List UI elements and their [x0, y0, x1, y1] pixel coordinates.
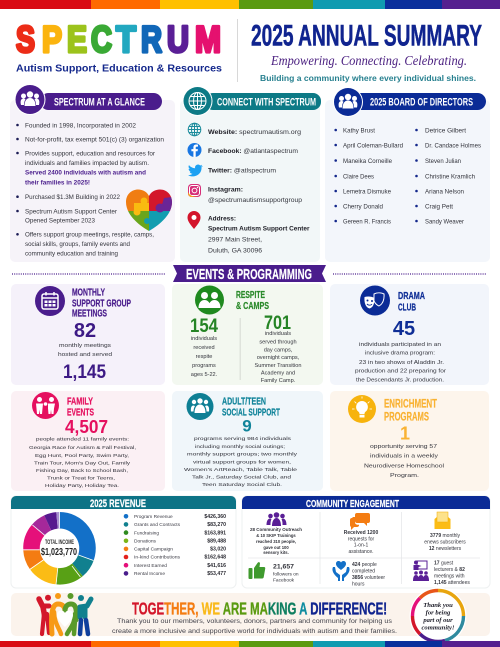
enrichment heading: PROGRAMS: [384, 410, 429, 424]
stat: guest lecturers: meetings with: [434, 574, 465, 580]
stat: volunteers: [332, 561, 385, 588]
stat: guest lecturers: lecturers & 82: [434, 567, 465, 573]
revenue legend: $53,477: [207, 571, 226, 577]
events and programming banner: [173, 265, 326, 283]
panel: 2025 revenue: [11, 496, 236, 588]
drama stats: inclusive drama program:: [365, 350, 435, 356]
respite stat 154: ages 5-22.: [191, 372, 218, 378]
board names: Cherry Donald: [343, 203, 383, 210]
subtitle script: Empowering. Connecting. Celebrating.: [270, 53, 467, 68]
events and programming banner: EVENTS & PROGRAMMING: [186, 267, 312, 283]
respite stat 154: respite: [196, 354, 212, 360]
stat: volunteers: completed: [352, 568, 375, 574]
revenue legend: $426,360: [204, 514, 226, 520]
revenue header: [11, 496, 236, 510]
adult teen heading: SOCIAL SUPPORT: [222, 406, 280, 418]
board names: Steven Julian: [425, 158, 461, 165]
logo: SPECTRUM: C: [91, 19, 112, 60]
adult teen stats: including monthly social outings;: [195, 444, 285, 449]
respite stat 701: overnight camps,: [257, 355, 300, 361]
family stats: Egg Hunt, Pool Party, Swim Party,: [35, 453, 129, 458]
respite stat 154: 154: [190, 316, 218, 337]
badge: thank you: [410, 588, 466, 644]
family heading: [67, 396, 94, 418]
board names: Detrice Gilbert: [425, 127, 466, 134]
revenue legend: Grants and Contracts: [134, 522, 181, 528]
illustration: four people with heart: [39, 593, 91, 634]
drama stats: [355, 318, 446, 384]
logo: SPECTRUM: [16, 19, 221, 60]
stat: guest lecturers: 1,145 attendees: [434, 580, 470, 586]
glance bullet list: Opened September 2023: [25, 218, 95, 225]
bottom rainbow bar: [0, 641, 500, 647]
logo: SPECTRUM: R: [141, 19, 162, 60]
monthly heading: SUPPORT GROUP: [72, 298, 131, 310]
glance bullet list: Served 2400 individuals with autism and: [25, 170, 146, 177]
adult teen stats: [184, 416, 298, 487]
respite stat 701: Summer Transition: [255, 363, 301, 369]
icon: group: [186, 393, 214, 420]
donut centre label: TOTAL INCOME: [45, 539, 74, 546]
badge: thank you: for being: [426, 610, 451, 616]
monthly stats: monthly meetings: [59, 343, 111, 349]
enrichment stats: Neurodiverse Homeschool: [364, 464, 444, 470]
respite stat 701: Academy and: [261, 370, 295, 376]
icon: calendar: [35, 286, 65, 316]
revenue legend: Fundraising: [134, 530, 159, 536]
logo: SPECTRUM: U: [167, 19, 189, 60]
enrichment stats: individuals in a weekly: [370, 454, 438, 460]
panel: board of directors: [325, 87, 490, 262]
drama heading: CLUB: [398, 302, 416, 314]
monthly heading: MONTHLY: [72, 288, 105, 298]
thank you message: Thank you to our members, volunteers, donors, partners and community for helping us: [117, 618, 393, 625]
family stats: 4,507: [65, 417, 108, 437]
enrichment heading: [384, 396, 437, 424]
stat: requests: assistance.: [348, 549, 374, 555]
drama stats: production and 22 preparing for: [355, 368, 446, 374]
revenue legend: Capital Campaign: [134, 547, 173, 553]
stat: requests: requests for: [348, 536, 375, 542]
family stats: Holiday Party, Holiday Tea.: [45, 483, 119, 488]
panel: adult teen social support: [172, 391, 323, 491]
icon: map pin: [188, 211, 200, 229]
enrichment heading: ENRICHMENT: [384, 396, 437, 410]
drama stats: 23 in two shows of Aladdin Jr.: [359, 360, 445, 366]
drama heading: DRAMA: [398, 290, 425, 302]
family heading: EVENTS: [67, 406, 94, 418]
glance bullet list: community education and training: [25, 250, 118, 257]
respite heading: [236, 290, 269, 312]
together heading: TOGETHER, WE ARE MAKING A DIFFERENCE!: [132, 598, 387, 618]
respite heading: & CAMPS: [236, 301, 269, 312]
adult teen stats: 9: [242, 416, 252, 436]
contact details: @spectrumautismsupportgroup: [208, 197, 302, 204]
glance header: [14, 84, 162, 115]
respite heading: RESPITE: [236, 290, 265, 301]
board names: Claire Dees: [343, 173, 374, 180]
adult teen stats: Women's ArtReach, Table Talk, Table: [184, 467, 298, 472]
glance header: SPECTRUM AT A GLANCE: [54, 96, 145, 108]
top rainbow bar: [0, 0, 500, 9]
adult teen stats: Talk Jr., Saturday Social Club, and: [192, 474, 292, 480]
icon: respite people: [195, 286, 224, 314]
revenue legend: [124, 514, 226, 577]
monthly stats: hosted and served: [58, 352, 112, 358]
board names: Sandy Weaver: [425, 218, 465, 225]
icon: puzzle heart: [126, 189, 172, 232]
icon: twitter: [188, 165, 203, 176]
enrichment stats: opportunity serving 57: [370, 444, 437, 450]
respite stat 701: individuals: [265, 331, 291, 337]
panel: respite and camps: [172, 284, 323, 385]
adult teen stats: monthly support groups; two monthly: [187, 452, 298, 457]
adult teen heading: ADULT/TEEN: [222, 396, 266, 408]
icon: instagram: [188, 184, 201, 197]
board names: Kathy Brust: [343, 127, 375, 134]
stat: outreach: sensory kits.: [263, 550, 289, 555]
icon: light bulb: [348, 395, 376, 423]
logo: SPECTRUM: M: [195, 19, 221, 60]
enrichment stats: 1: [400, 424, 410, 444]
badge: thank you: community!: [422, 624, 455, 632]
monthly heading: MEETINGS: [72, 308, 107, 320]
icon: website: [188, 123, 201, 136]
stat: facebook followers: 21,657: [273, 564, 295, 570]
board names: Ariana Nelson: [425, 188, 464, 195]
contact details: Duluth, GA 30096: [208, 248, 262, 254]
contact details: Instagram:: [208, 186, 243, 194]
panel: spectrum at a glance: [10, 84, 175, 262]
logo: SPECTRUM: P: [42, 19, 62, 60]
monthly stats: [58, 320, 112, 383]
panel: monthly support group meetings: [11, 284, 165, 385]
stat: enews: 3779 monthly: [430, 533, 461, 539]
family stats: Fishing Day, Back to School Bash,: [36, 468, 128, 473]
board names: Dr. Candace Holmes: [425, 142, 481, 149]
panel: drama club: [330, 284, 489, 385]
drama stats: the Descendants Jr. production.: [356, 378, 444, 384]
enrichment stats: [364, 424, 444, 479]
stat: facebook followers: [248, 562, 299, 584]
contact details: Twitter: @atlspectrum: [208, 167, 276, 174]
thank you message: [112, 618, 397, 635]
board names: April Coleman-Bullard: [343, 142, 403, 149]
contact details: Address:: [208, 216, 236, 222]
revenue header: 2025 REVENUE: [90, 498, 146, 510]
logo tagline: Autism Support, Education & Resources: [16, 62, 222, 74]
revenue legend: Rental Income: [134, 571, 165, 577]
panel: connect with spectrum: [180, 86, 321, 262]
panel: footer thank you: [11, 588, 490, 644]
stat: volunteers: 3856 volunteer: [352, 575, 385, 581]
revenue legend: $162,648: [204, 555, 226, 561]
contact details: Facebook: @atlantaspectrum: [208, 148, 298, 155]
board names: Christine Kramlich: [425, 173, 475, 180]
glance bullet list: Purchased $1.3M Building in 2022: [25, 194, 120, 201]
monthly heading: [72, 288, 131, 320]
donut chart: [23, 512, 93, 584]
connect header: CONNECT WITH SPECTRUM: [217, 96, 316, 108]
respite stat 701: 701: [264, 313, 291, 334]
community header: COMMUNITY ENGAGEMENT: [306, 498, 399, 510]
revenue legend: $41,616: [207, 563, 226, 569]
family stats: [29, 417, 136, 488]
stat: volunteers: 424 people: [352, 562, 377, 568]
stat: enews: 12 newsletters: [429, 546, 462, 552]
family stats: Train Tour, Mom's Day Out, Family: [34, 460, 131, 465]
badge: thank you: part of our: [422, 617, 453, 624]
icon: drama masks: [360, 286, 390, 316]
board names: [334, 127, 481, 225]
respite stat 154: individuals: [191, 336, 217, 342]
stat: requests: [344, 513, 378, 555]
logo: SPECTRUM: E: [67, 19, 87, 60]
stat: guest lecturers: 17 guest: [434, 560, 454, 566]
adult teen stats: virtual support groups for women,: [193, 460, 291, 464]
panel: family events: [11, 391, 165, 491]
stat: outreach: gave out 100: [263, 545, 289, 550]
logo: SPECTRUM: S: [16, 19, 35, 60]
board names: Lemetra Dismuke: [343, 188, 391, 195]
respite stat 154: programs: [192, 363, 216, 369]
revenue legend: $163,891: [204, 530, 226, 536]
family heading: FAMILY: [67, 396, 93, 408]
family stats: Trunk or Treat for Teens,: [47, 476, 115, 480]
drama heading: [398, 290, 425, 314]
contact details: 2997 Main Street,: [208, 236, 262, 244]
glance bullet list: individuals and families impacted by autism.: [25, 160, 149, 167]
community header: [242, 496, 490, 510]
stat: outreach: 28 Community Outreach: [250, 527, 302, 532]
stat: outreach: & 10 SKIP Trainings: [256, 533, 296, 538]
respite stat 154: [190, 316, 218, 378]
glance bullet list: their families in 2025!: [25, 179, 90, 186]
respite stat 701: day camps,: [264, 348, 293, 354]
drama stats: 45: [393, 318, 415, 340]
donut centre label: [41, 539, 77, 558]
icon: family: [32, 392, 59, 419]
enrichment stats: Program.: [390, 473, 420, 479]
glance bullet list: Founded in 1998, Incorporated in 2002: [25, 122, 136, 129]
drama stats: individuals participated in an: [359, 342, 441, 348]
stat: requests: 1-on-1: [354, 542, 368, 548]
board header: [333, 87, 486, 117]
adult teen stats: Teen Saturday Social Club.: [202, 482, 282, 487]
thank you message: create a more inclusive and supportive world for individuals with autism and their families.: [112, 628, 397, 635]
stat: enews: [424, 512, 466, 552]
badge: thank you: Thank you: [423, 602, 453, 609]
board names: Gereen R. Francis: [343, 218, 391, 225]
glance bullet list: Provides support, education and resources for: [25, 150, 156, 157]
stat: volunteers: hours: [352, 582, 365, 588]
respite stat 701: served through: [259, 340, 297, 346]
glance bullet list: Spectrum Autism Support Center: [25, 208, 118, 215]
stat: requests: Received 1200: [344, 530, 378, 536]
glance bullet list: Offers support group meetings, respite, camps,: [25, 232, 154, 239]
glance bullet list: [16, 122, 164, 257]
stat: facebook followers: followers on: [273, 572, 299, 578]
board names: Maneika Corneille: [343, 158, 392, 165]
monthly stats: 1,145: [63, 362, 106, 383]
respite stat 701: Family Camp.: [261, 378, 296, 384]
stat: outreach: [250, 512, 302, 555]
glance bullet list: social skills, groups, family events and: [25, 241, 130, 248]
stat: guest lecturers: [413, 560, 470, 586]
respite stat 154: received: [193, 345, 215, 351]
revenue legend: In-kind Contributions: [134, 555, 181, 561]
revenue legend: Interest Earned: [134, 563, 167, 569]
mission line: Building a community where every individual shines.: [260, 73, 476, 83]
board names: Craig Pett: [425, 203, 453, 210]
respite stat 701: [255, 313, 301, 384]
glance bullet list: Not-for-profit, tax exempt 501(c) (3) organization: [25, 136, 164, 143]
stat: outreach: reached 310 people,: [256, 539, 296, 544]
family stats: Georgia Race for Autism & Fall Festival,: [29, 445, 136, 450]
logo: SPECTRUM: T: [116, 19, 136, 60]
stat: enews: enews subscribers: [424, 540, 466, 546]
stat: facebook followers: Facebook: [273, 578, 295, 584]
revenue legend: $3,020: [210, 547, 226, 553]
contact details: Spectrum Autism Support Center: [208, 226, 310, 233]
donut centre label: $1,023,770: [41, 547, 77, 558]
revenue legend: $89,488: [207, 538, 226, 544]
contact details: [208, 129, 310, 254]
connect header: [182, 86, 321, 116]
revenue legend: Donations: [134, 538, 157, 544]
contact details: Website: spectrumautism.org: [208, 129, 301, 136]
panel: enrichment programs: [330, 391, 489, 491]
revenue legend: Program Revenue: [134, 514, 173, 520]
panel: community engagement: [242, 496, 490, 588]
adult teen heading: [222, 396, 280, 418]
adult teen stats: programs serving 984 individuals: [194, 436, 292, 441]
family stats: people attended 11 family events:: [36, 436, 129, 441]
revenue legend: $83,270: [207, 522, 226, 528]
monthly stats: 82: [74, 320, 96, 342]
icon: facebook: [188, 143, 202, 157]
